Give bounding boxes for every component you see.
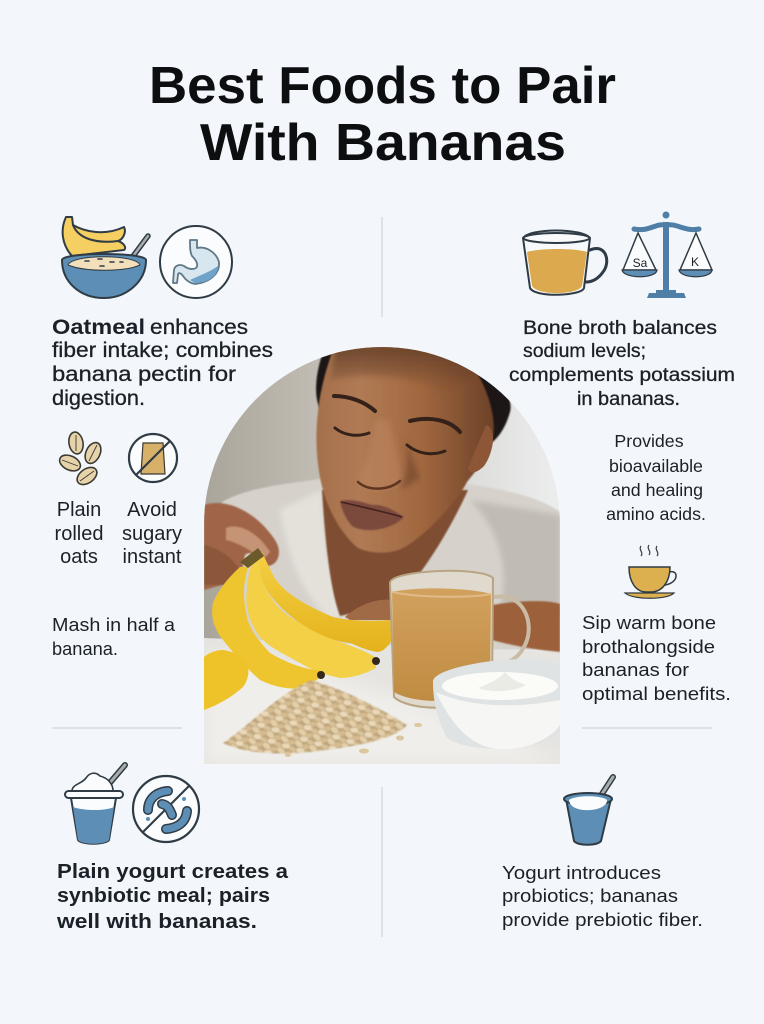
text: probiotics: probiotics; bananas: [502, 885, 678, 906]
text: sip tip: bananas for: [582, 659, 689, 680]
eyebrows and eyes: [334, 396, 460, 489]
text: plain yogurt: [56, 860, 289, 933]
neck: [322, 490, 468, 616]
table: [204, 638, 560, 764]
text: oatmeal: [52, 316, 273, 410]
text: sip tip: brothalongside: [582, 636, 715, 657]
icon: balance scales Sa K: [622, 212, 712, 298]
text: bone broth: complements potassium: [509, 364, 735, 386]
title: With Bananas: [200, 114, 566, 172]
lips: [340, 500, 404, 530]
text: mash tip: banana.: [52, 638, 118, 659]
icon: balance scales Sa K: K: [691, 255, 699, 269]
text: oatmeal: fiber intake; combines: [52, 339, 273, 362]
text: sip tip: optimal benefits.: [582, 683, 731, 704]
title: [149, 57, 616, 172]
text: mash tip: Mash in half a: [52, 614, 176, 635]
text: mash tip: [52, 614, 176, 659]
icon: oat grains: [57, 431, 104, 488]
text: sip tip: [582, 612, 731, 704]
text: sip tip: Sip warm bone: [582, 612, 716, 633]
text: bone broth: Bone broth balances: [523, 317, 717, 339]
text: oatmeal: Oatmeal: [52, 316, 145, 339]
text: plain yogurt: synbiotic meal; pairs: [57, 884, 270, 907]
text: amino acids: amino acids.: [606, 504, 706, 524]
text: plain rolled oats: Plain: [57, 499, 101, 521]
icon: yogurt cup: [65, 765, 125, 844]
face: [316, 345, 494, 553]
broth mug: [390, 571, 529, 708]
text: avoid sugary instant: [122, 499, 182, 568]
wall: [204, 347, 560, 647]
text: avoid sugary instant: Avoid: [127, 499, 177, 521]
text: probiotics: Yogurt introduces: [502, 862, 661, 883]
text: amino acids: bioavailable: [609, 456, 703, 476]
icon: steaming teacup: [625, 545, 676, 598]
text: plain yogurt: Plain yogurt creates a: [57, 860, 289, 883]
icon: balance scales Sa K: Sa: [633, 256, 648, 270]
oats pile: [223, 680, 422, 757]
central photo: woman with bananas, broth, oats, yogurt: [204, 345, 560, 764]
text: plain rolled oats: rolled: [55, 523, 103, 545]
icon: stomach: [160, 226, 232, 298]
nose: [367, 422, 400, 486]
text: plain rolled oats: oats: [60, 546, 98, 568]
left hand: [204, 503, 279, 590]
icon: small yogurt cup: [564, 777, 613, 845]
text: probiotics: provide prebiotic fiber.: [502, 909, 703, 930]
icon: broth mug: [523, 230, 607, 295]
ear: [468, 425, 493, 472]
icon: no bacteria: [133, 776, 199, 842]
text: avoid sugary instant: instant: [123, 546, 182, 568]
title: Best Foods to Pair: [149, 57, 616, 115]
text: oatmeal: banana pectin for: [52, 363, 236, 386]
text: bone broth: sodium levels;: [523, 340, 646, 362]
text: amino acids: Provides: [614, 431, 684, 451]
text: plain rolled oats: [55, 499, 103, 568]
bananas: [204, 548, 392, 710]
icon: no sugary instant packet: [129, 434, 177, 482]
text: oatmeal: digestion.: [52, 387, 145, 410]
text: plain yogurt: well with bananas.: [56, 910, 257, 933]
text: amino acids: and healing: [611, 480, 703, 500]
text: bone broth: [509, 317, 735, 410]
text: probiotics: [502, 862, 703, 930]
icon: bananas and oatmeal bowl: [62, 217, 148, 298]
forearms: [492, 601, 560, 652]
text: bone broth: in bananas.: [577, 388, 680, 410]
yogurt bowl: [433, 659, 560, 749]
hair: [315, 351, 512, 444]
text: oatmeal: enhances: [150, 316, 248, 339]
dividers: [52, 217, 712, 937]
person: [222, 345, 560, 650]
text: avoid sugary instant: sugary: [122, 523, 182, 545]
text: amino acids: [606, 431, 706, 524]
shirt: [222, 478, 560, 650]
